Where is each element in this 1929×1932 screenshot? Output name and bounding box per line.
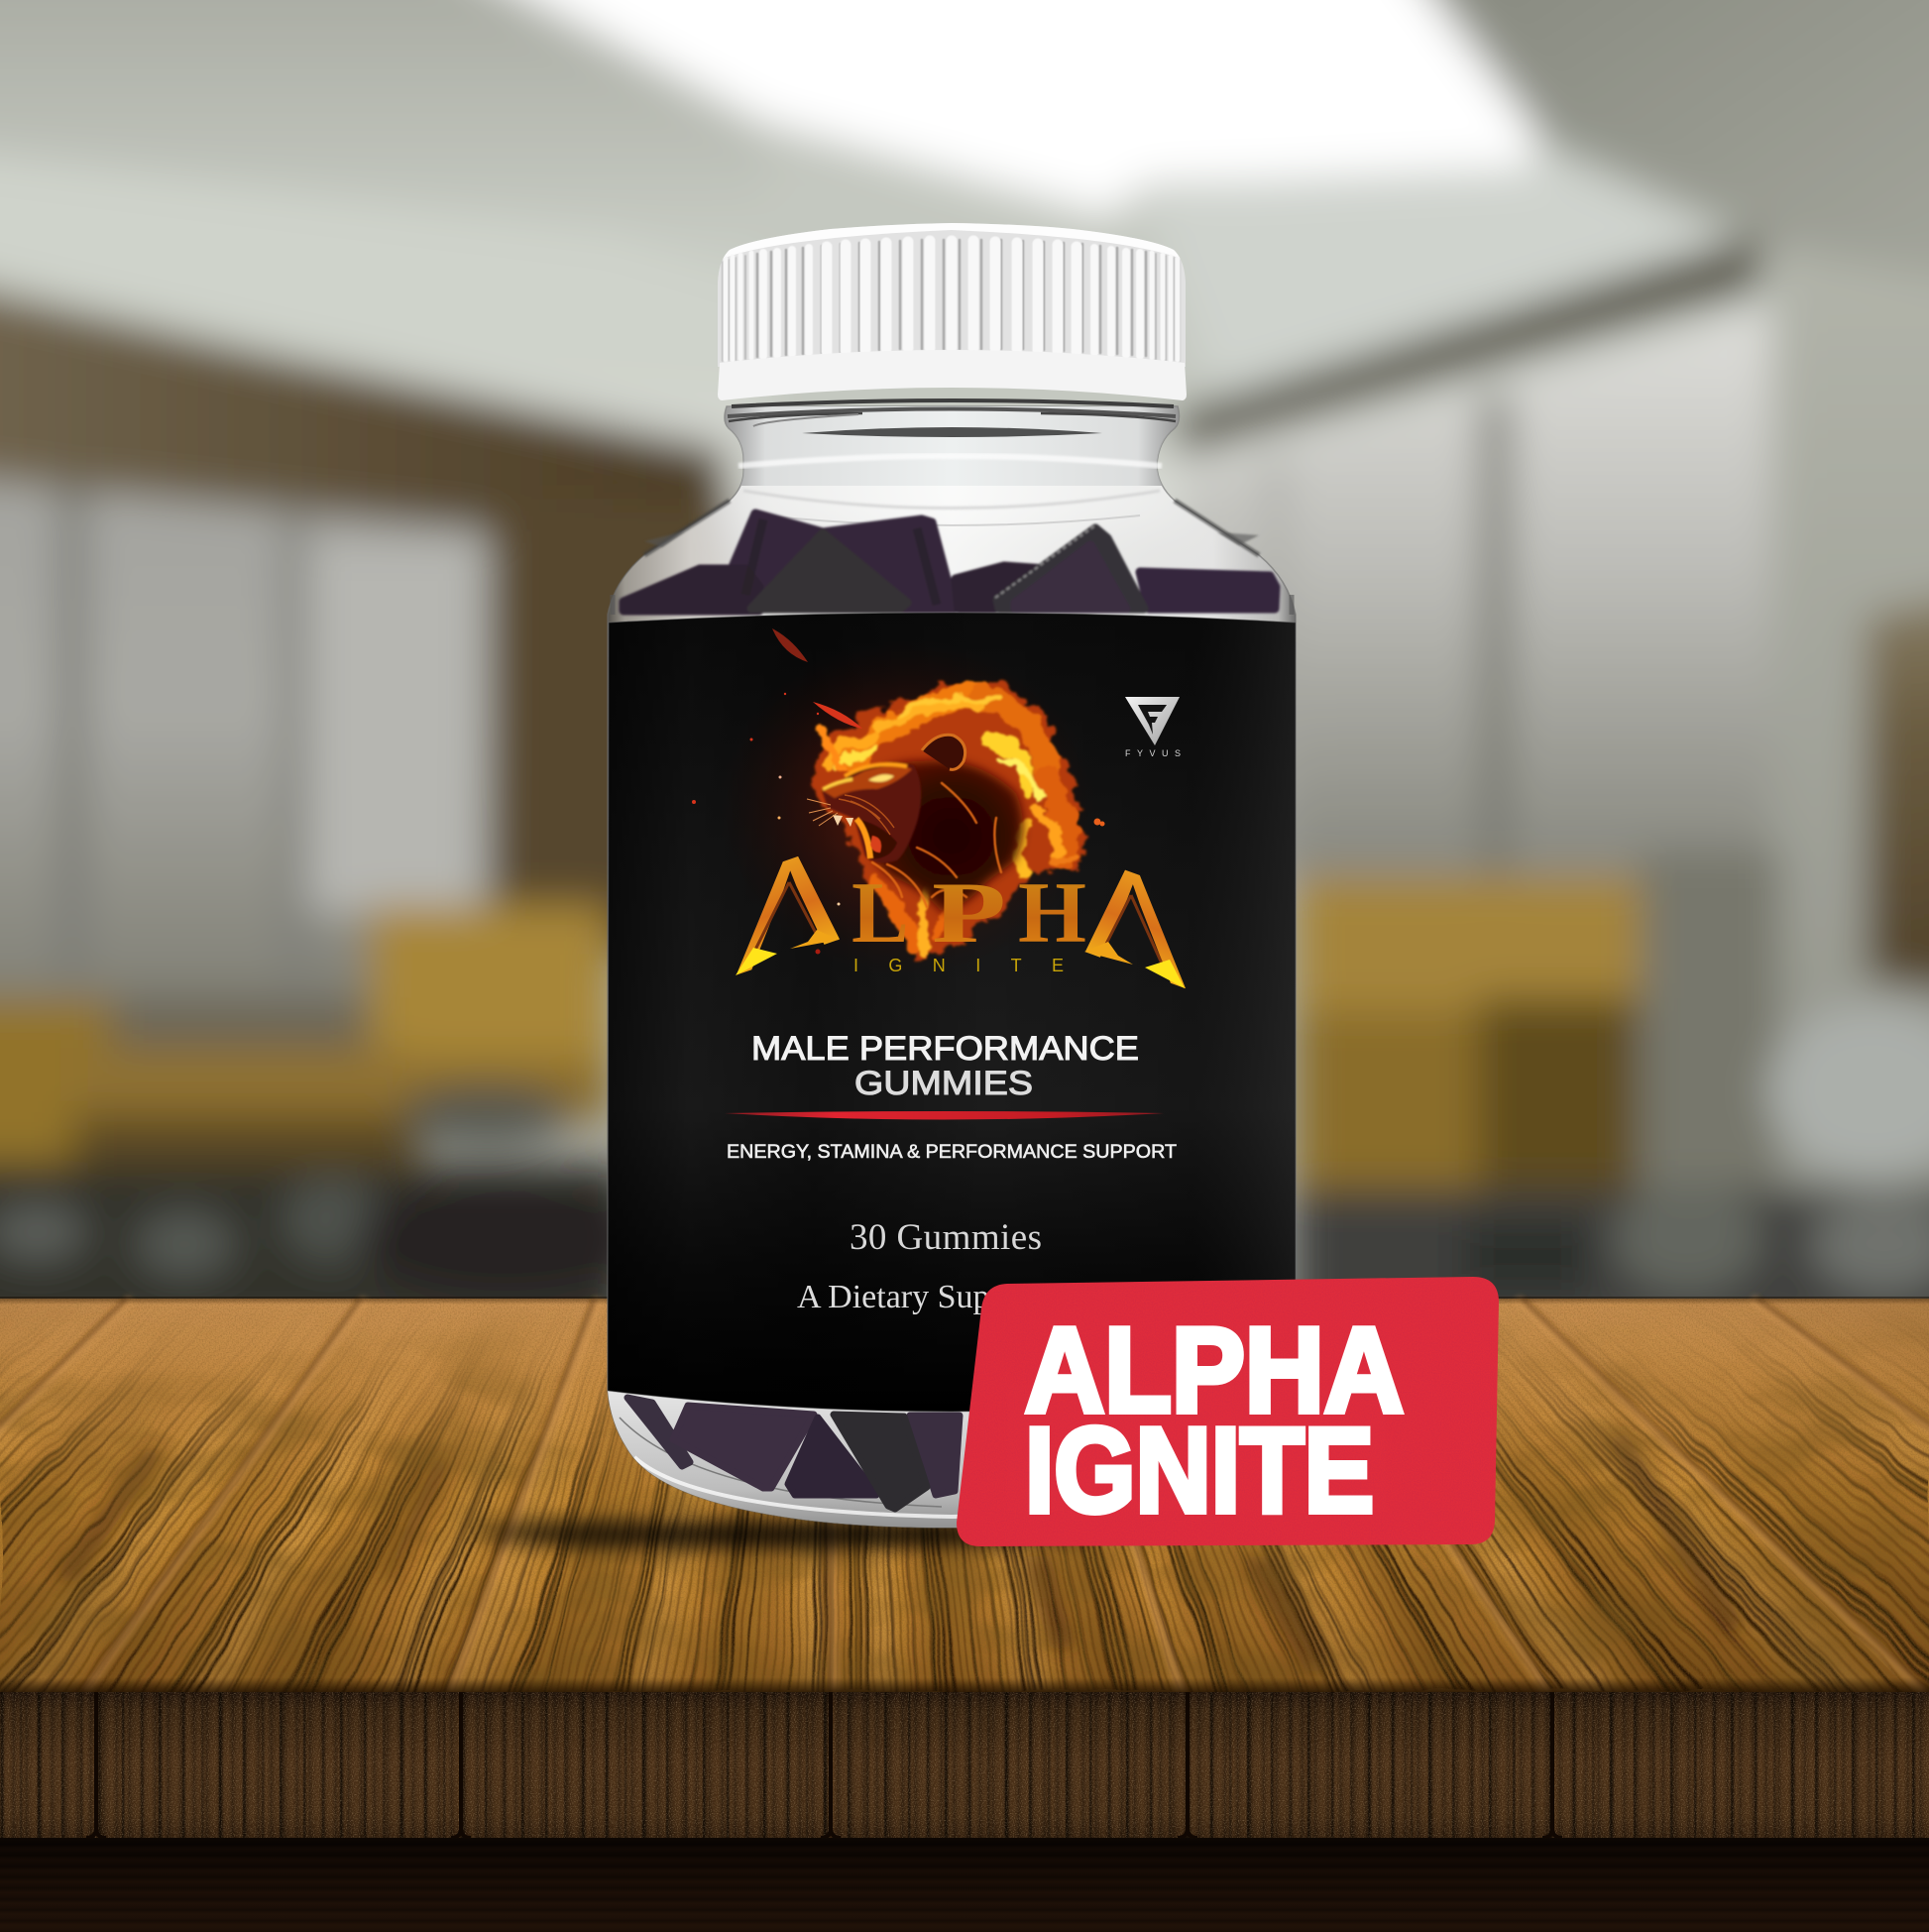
headline: GUMMIES	[854, 1065, 1033, 1102]
cap	[718, 220, 1187, 400]
ALPHA logotype: L	[851, 865, 909, 962]
ALPHA logotype: Λ	[735, 811, 844, 1006]
whiskers	[807, 799, 838, 826]
FYVUS logo	[1125, 697, 1181, 758]
lion head	[807, 735, 1023, 912]
neck threads	[728, 400, 1176, 437]
bottle glass body	[608, 401, 1296, 1528]
headline: MALE PERFORMANCE	[751, 1030, 1139, 1068]
red swoosh	[725, 1111, 1164, 1120]
headline	[751, 1030, 1139, 1102]
cap ring	[718, 350, 1187, 400]
badge title: ALPHA	[1025, 1303, 1404, 1437]
ear	[922, 735, 965, 769]
sparks	[692, 628, 1104, 954]
ALPHA logotype: P	[932, 865, 1006, 962]
lion illustration	[692, 628, 1104, 976]
mouth	[856, 819, 897, 858]
tagline: ENERGY, STAMINA & PERFORMANCE SUPPORT	[727, 1142, 1177, 1163]
FYVUS logo: FYVUS	[1125, 748, 1181, 758]
badge title	[1025, 1303, 1404, 1537]
gummies top	[624, 513, 1276, 611]
mane highlights	[821, 694, 1078, 954]
gummies bottom	[608, 1391, 969, 1528]
flame mane	[815, 680, 1082, 960]
30 Gummies: 30 Gummies	[850, 1217, 1042, 1258]
blurred room background	[0, 0, 1929, 1299]
IGNITE small: IGNITE	[853, 956, 1064, 975]
dark area under table	[0, 1838, 1929, 1932]
ALPHA logotype: H	[1018, 865, 1086, 962]
wooden tabletop	[0, 1299, 1929, 1692]
table front edge	[0, 1692, 1929, 1838]
neck hairs	[872, 783, 1001, 907]
ALPHA logotype: Λ	[1080, 824, 1188, 1019]
plank seams	[0, 1294, 1929, 1692]
cap ridges	[726, 241, 1178, 360]
wood grain lines	[0, 1322, 1929, 1692]
lion face	[822, 761, 921, 863]
contact shadow on table	[476, 1521, 1090, 1548]
badge title: IGNITE	[1025, 1403, 1374, 1537]
cap ridges shadow	[723, 240, 1180, 361]
A Dietary Supplement: A Dietary Supplement	[797, 1279, 1099, 1315]
red badge	[957, 1277, 1499, 1546]
bottle, label and badge	[471, 223, 1499, 1564]
front edge plank joints and speckle	[0, 1692, 1929, 1838]
ALPHA logotype	[735, 811, 1188, 1019]
label	[608, 613, 1296, 1412]
